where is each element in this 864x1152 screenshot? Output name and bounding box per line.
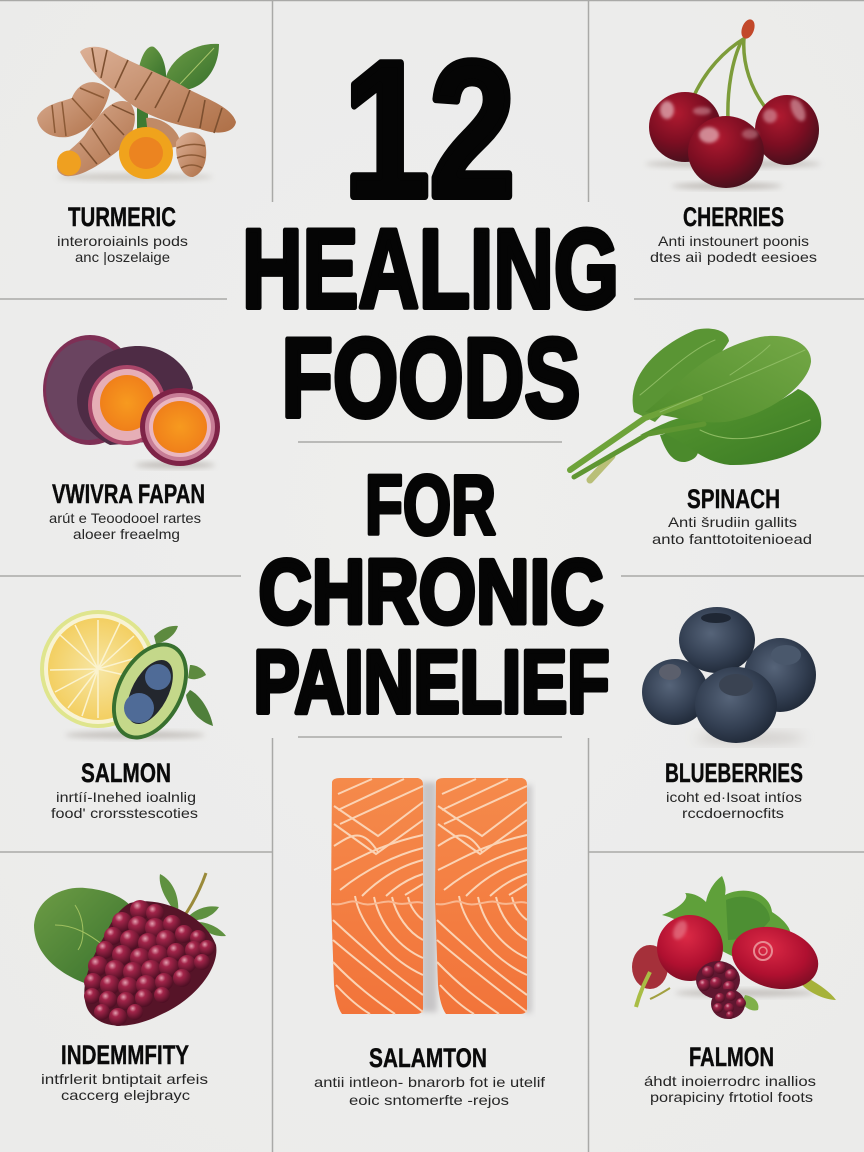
description: turmeric [57,233,188,265]
panel: turmeric [37,44,236,265]
name: salmon: SALMON [81,758,171,788]
name: purple root: VWIVRA FAPAN [52,479,205,509]
name: cherries: CHERRIES [683,202,784,232]
description: cherries [650,233,817,265]
description: indemmfity: caccerg elejbrayc [61,1087,190,1103]
description: salmon: food' crorsstescoties [51,805,198,821]
panel: red berries [632,876,836,1105]
icon: lemon and avocado [40,610,213,752]
description: turmeric: interoroiainls pods [57,233,188,249]
description: purple root [49,510,201,542]
panel: salmon fillets [314,778,545,1108]
description: salmon [51,789,198,821]
description: indemmfity: intfrlerit bntiptait arfeis [41,1071,208,1087]
description: salamton: antii intleon- bnarorb fot ie utelif [314,1074,545,1090]
title: for: FOR [365,458,496,552]
description: falmon: porapiciny frtotiol foots [650,1089,813,1105]
description: spinach [652,514,812,547]
description: indemmfity [41,1071,208,1103]
name: falmon: FALMON [689,1042,774,1072]
description: turmeric: anc |oszelaige [75,249,170,265]
icon: raspberry with leaf [34,873,226,1026]
title: chronic: CHRONIC [258,542,604,643]
icon: cherries [645,18,821,189]
icon: blueberries [642,607,816,743]
panel: cherries [645,18,821,265]
name: salamton: SALAMTON [369,1043,487,1073]
description: blueberries: rccdoernocfits [682,805,784,821]
name: turmeric: TURMERIC [68,202,176,232]
description: spinach: Anti šrudiin gallits [668,514,797,530]
title: 12: 12 [344,21,515,237]
icon: spinach leaves [570,328,821,480]
icon: sliced purple root [43,335,220,468]
description: blueberries [666,789,802,821]
title [242,21,619,732]
panel: blueberries [642,607,816,821]
title: foods: FOODS [282,316,580,440]
description: purple root: aloeer freaelmg [73,526,180,542]
icon: red berries with herbs [632,876,836,1019]
description: cherries: Anti instounert poonis [658,233,809,249]
icon: salmon fillets [331,778,532,1014]
panel: spinach [570,328,821,547]
description: blueberries: icoht ed·Isoat intíos [666,789,802,805]
description: falmon: áhdt inoierrodrc inallios [644,1073,816,1089]
name: blueberries: BLUEBERRIES [665,758,803,788]
name: indemmfity: INDEMMFITY [61,1040,189,1070]
name: spinach: SPINACH [687,484,780,514]
title: painelief: PAINELIEF [254,632,610,732]
description: salamton [314,1074,545,1108]
icon: turmeric roots [37,44,236,181]
description: purple root: arút e Teoodooel rartes [49,510,201,526]
description: salmon: inrtíí-Inehed ioalnlig [56,789,196,805]
title: healing: HEALING [242,206,619,332]
description: cherries: dtes aiì podedt eesioes [650,249,817,265]
panel: purple root [43,335,220,542]
description: spinach: anto fanttotoitenioead [652,531,812,547]
description: salamton: eoic sntomerfte -rejos [349,1092,509,1108]
panel: lemon and avocado [40,610,213,821]
description: falmon [644,1073,816,1105]
panel: raspberry [34,873,226,1103]
